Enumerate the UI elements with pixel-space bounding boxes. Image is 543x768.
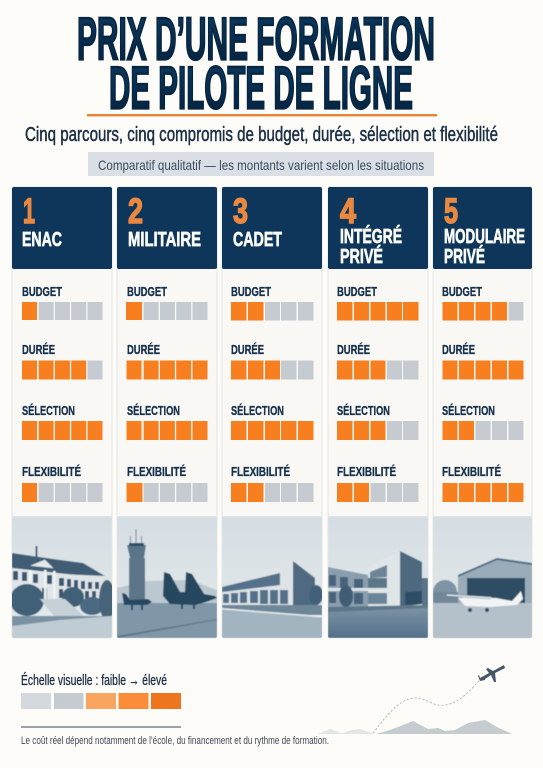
header: Militaire <box>117 187 217 269</box>
note badge <box>88 152 434 176</box>
legend: Échelle visuelle : faible → élevé <box>21 672 167 689</box>
rating: flexibilité: FLEXIBILITÉ <box>22 464 81 479</box>
header: Modulaire privé: PRIVÉ <box>444 245 485 268</box>
rating: durée: DURÉE <box>22 342 55 357</box>
header: Intégré privé: 4 <box>340 192 356 231</box>
panel: ENAC <box>10 187 115 638</box>
rating: durée <box>442 342 524 380</box>
rating: flexibilité: FLEXIBILITÉ <box>127 464 186 479</box>
header: Intégré privé <box>328 187 428 269</box>
illustration: école ENAC <box>10 516 115 638</box>
header: Militaire: 2 <box>128 192 143 231</box>
header: Cadet: 3 <box>233 192 248 231</box>
rating: sélection: SÉLECTION <box>231 403 284 418</box>
rating: budget <box>126 284 208 320</box>
icon: plane <box>478 665 505 682</box>
panel: Modulaire privé <box>433 187 532 638</box>
footer rule <box>21 726 181 728</box>
rating: sélection <box>22 403 102 440</box>
rating: budget: BUDGET <box>22 284 62 299</box>
header: Militaire: MILITAIRE <box>128 229 201 251</box>
rating: flexibilité: FLEXIBILITÉ <box>231 464 290 479</box>
header: Modulaire privé: 5 <box>444 192 458 231</box>
rating: durée <box>22 342 102 380</box>
rating: budget <box>442 284 524 320</box>
rating: flexibilité <box>22 464 102 502</box>
header: ENAC <box>12 187 112 269</box>
header: Cadet: CADET <box>233 229 282 251</box>
rating: budget <box>231 284 314 320</box>
header: Intégré privé: INTÉGRÉ <box>340 225 402 248</box>
panel: Intégré privé <box>328 187 428 638</box>
illustration: école privée <box>328 516 428 638</box>
rating: durée <box>337 342 418 380</box>
rating: sélection: SÉLECTION <box>442 403 495 418</box>
rating: flexibilité <box>126 464 208 502</box>
rating: durée: DURÉE <box>231 342 264 357</box>
header: ENAC: 1 <box>23 192 35 231</box>
rating: flexibilité: FLEXIBILITÉ <box>442 464 501 479</box>
title <box>77 6 435 122</box>
illustration: hangar et avion léger <box>433 516 532 638</box>
rating: flexibilité <box>442 464 524 502</box>
rating: sélection <box>442 403 524 440</box>
title underline <box>87 114 437 116</box>
mountains <box>318 720 512 734</box>
illustration: bâtiment de compagnie <box>222 516 323 638</box>
note badge: Comparatif qualitatif — les montants varient selon les situations <box>98 157 424 173</box>
rating: budget: BUDGET <box>231 284 271 299</box>
rating: flexibilité <box>231 464 314 502</box>
rating: budget: BUDGET <box>127 284 167 299</box>
header: ENAC: ENAC <box>22 229 62 251</box>
illustration: tour de contrôle et avions militaires <box>117 516 217 638</box>
rating: flexibilité <box>337 464 418 502</box>
footnote: Le coût réel dépend notamment de l’école, du financement et du rythme de formation. <box>21 735 329 747</box>
rating: flexibilité: FLEXIBILITÉ <box>337 464 396 479</box>
header: Modulaire privé <box>433 187 532 269</box>
panel: Cadet <box>222 187 323 638</box>
rating: sélection <box>231 403 314 440</box>
rating: durée: DURÉE <box>442 342 475 357</box>
rating: budget: BUDGET <box>337 284 377 299</box>
flight path <box>373 681 479 733</box>
rating: durée <box>126 342 208 380</box>
rating: budget <box>337 284 418 320</box>
rating: sélection: SÉLECTION <box>127 403 180 418</box>
legend <box>21 672 181 709</box>
rating: durée: DURÉE <box>127 342 160 357</box>
header: Cadet <box>222 187 322 269</box>
rating: durée <box>231 342 314 380</box>
panel: Militaire <box>117 187 217 638</box>
rating: budget: BUDGET <box>442 284 482 299</box>
rating: sélection: SÉLECTION <box>22 403 75 418</box>
rating: sélection <box>337 403 418 440</box>
header: Intégré privé: PRIVÉ <box>340 245 383 268</box>
rating: budget <box>22 284 102 320</box>
rating: durée: DURÉE <box>337 342 370 357</box>
rating: sélection <box>126 403 208 440</box>
rating: sélection: SÉLECTION <box>337 403 390 418</box>
